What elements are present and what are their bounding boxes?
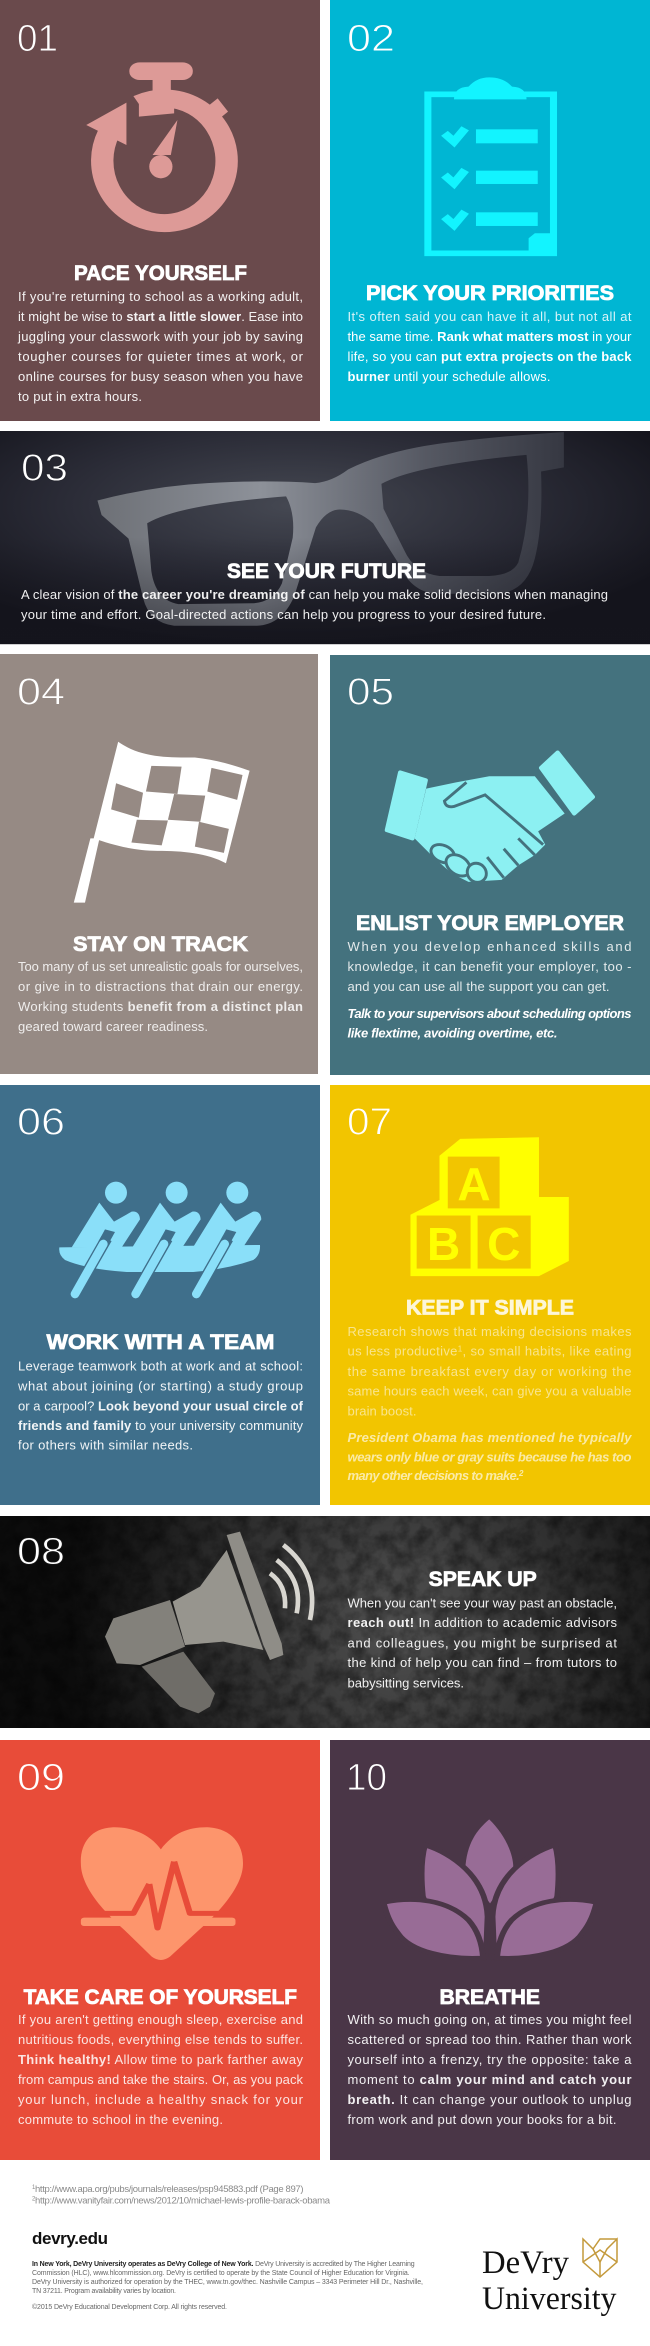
body text: It's often said you can have it all, but not all at [348,309,632,324]
body text: Think healthy! Allow time to park farther away [18,2052,304,2067]
icon: ABC blocks [410,1137,569,1276]
body text: Working students benefit from a distinct plan [18,999,303,1014]
body text: If you aren't getting enough sleep, exercise and [18,2012,303,2027]
heading: PACE YOURSELF [74,262,247,285]
number 08: 08 [17,1531,65,1573]
body text: the same time. Rank what matters most in your [348,329,632,344]
icon: lotus flower [384,1819,597,1958]
panel 05: enlist your employer [330,655,650,1075]
heading: STAY ON TRACK [73,933,248,956]
callout: Obama note [348,1430,632,1483]
icon: ABC blocks: B [427,1218,460,1270]
body text: When you can't see your way past an obstacle, [348,1595,617,1610]
body text: geared toward career readiness. [18,1019,208,1034]
body text [21,587,608,622]
icon: ABC blocks: C [487,1218,520,1270]
panel 10: breathe [330,1740,650,2160]
body text: online courses for busy season when you have [18,369,303,384]
panel 08: speak up [0,1516,650,1728]
body text: for others with similar needs. [18,1438,193,1452]
body text: A clear vision of the career you're dreaming of can help you make solid decisions when managing [21,587,608,602]
body text: the same breakfast every day or working the [348,1364,632,1379]
heading: SEE YOUR FUTURE [227,560,426,583]
body text: burner until your schedule allows. [348,369,550,384]
icon: ABC blocks: A [457,1158,491,1210]
footer: accreditation text: TN 37211. Program availability varies by location. [32,2288,176,2295]
body text: reach out! In addition to academic advisors [348,1615,618,1630]
body text: commute to school in the evening. [18,2112,223,2127]
body text [17,1358,304,1452]
number 04: 04 [17,672,65,714]
body text [18,2012,304,2127]
icon: handshake [387,753,593,886]
body text: it might be wise to start a little slower. Ease into [18,309,303,324]
body text: what about joining (or starting) a study group [17,1378,303,1393]
body text [348,309,632,384]
icon: rowing team [59,1182,261,1297]
body text [18,959,303,1034]
body text: breath. It can change your outlook to unplug [348,2092,632,2107]
body text: When you develop enhanced skills and [348,939,632,954]
footer: website: devry.edu [32,2229,108,2248]
body text: your lunch, include a healthy snack for your [18,2092,304,2107]
footer: source references: 2 [32,2196,36,2202]
body text: tougher courses for quieter times at work, or [18,349,304,364]
body text: knowledge, it can benefit your employer, too - [348,959,632,974]
logo: DeVry University [482,2239,617,2317]
body text: yourself into a frenzy, try the opposite: take a [348,2052,632,2067]
heading: PICK YOUR PRIORITIES [366,282,614,305]
body text: us less productive [348,1344,457,1359]
logo: DeVry University: DeVry [482,2245,569,2281]
icon: stopwatch [86,62,228,223]
icon: megaphone [105,1532,312,1713]
body text: juggling your classwork with your job by saving [17,329,303,344]
callout: Obama note: 2 [518,1469,524,1478]
callout: Obama note: President Obama has mentioned he typically [348,1430,632,1445]
body text: or a carpool? Look beyond your usual circle of [18,1398,304,1413]
body text: , so small habits, like eating [463,1344,632,1359]
number 09: 09 [17,1757,65,1799]
icon: glasses [0,430,650,644]
footer: source references [32,2184,331,2206]
body text: brain boost. [348,1403,416,1418]
number 02: 02 [347,18,395,60]
panel 02: pick your priorities [330,0,650,421]
body text [348,939,632,1040]
body text: friends and family to your university community [18,1418,304,1433]
panel 03: see your future [0,430,650,644]
body text: the kind of help you can find – from tutors to [348,1655,617,1670]
footer: source references: http://www.apa.org/pubs/journals/releases/psp945883.pdf (Page 897) [35,2184,303,2195]
footer: accreditation text: In New York, DeVry University operates as DeVry College of New York. DeVry University is accredited by The Higher Learning [32,2261,415,2268]
panel 07: keep it simple [330,1085,650,1505]
icon: clipboard checklist [428,77,555,255]
body text: to put in extra hours. [18,389,142,404]
panel 06: work with a team [0,1085,320,1505]
icon: gold shield [583,2239,617,2277]
heading: WORK WITH A TEAM [46,1331,274,1354]
body text [348,1595,618,1690]
panel 09: take care of yourself [0,1740,320,2160]
body text: your time and effort. Goal-directed actions can help you progress to your desired future. [21,607,546,622]
heading: ENLIST YOUR EMPLOYER [356,912,624,935]
callout: Obama note: wears only blue or gray suits because he has too [348,1450,632,1465]
body text: or give in to distractions that drain our energy. [18,979,303,994]
footer: accreditation text: DeVry University is authorized for operation by the THEC, www.tn.gov/thec. Nashville Campus – 3343 Perimeter Hill Dr., Nashville, [32,2279,423,2286]
heading: BREATHE [440,1986,540,2009]
body text [17,289,304,404]
body text: and you can use all the support you can get. [348,979,610,994]
body text: nutritious foods, everything else tends to suffer. [18,2032,303,2047]
number 10: 10 [346,1757,387,1799]
body text: 1 [458,1345,463,1354]
number 05: 05 [347,672,394,714]
number 01: 01 [17,18,58,60]
number 07: 07 [347,1102,392,1144]
heading: SPEAK UP [429,1568,537,1591]
footer: accreditation text [32,2261,423,2311]
body text: Research shows that making decisions makes [348,1324,632,1339]
callout: Obama note: many other decisions to make. [348,1468,520,1483]
body text: like flextime, avoiding overtime, etc. [348,1026,558,1040]
body text: With so much going on, at times you might feel [348,2012,632,2027]
body text: from campus and take the stairs. Or, as you pack [18,2072,304,2087]
footer: accreditation text: Commission (HLC), www.hlcommission.org. DeVry is certified to operate by the State Council of Higher Education for Virginia. [32,2270,410,2277]
body text: Leverage teamwork both at work and at school: [18,1358,303,1373]
number 03: 03 [21,448,68,490]
footer: source references: http://www.vanityfair.com/news/2012/10/michael-lewis-profile-barack-obama [35,2196,331,2206]
heading: KEEP IT SIMPLE [406,1296,574,1319]
body text: same hours each week, can give you a valuable [348,1384,632,1399]
body text: from work and put down your books for a bit. [348,2112,616,2127]
body text: Too many of us set unrealistic goals for ourselves, [18,959,303,974]
footer: accreditation text: ©2015 DeVry Educational Development Corp. All rights reserved. [32,2303,227,2311]
body text: Talk to your supervisors about scheduling options [348,1006,632,1021]
heading: TAKE CARE OF YOURSELF [24,1986,297,2009]
footer: source references: 1 [32,2185,36,2191]
icon: heart with pulse [81,1827,243,1960]
panel 01: pace yourself [0,0,320,421]
body text [348,1324,632,1418]
body text: babysitting services. [348,1675,464,1690]
body text: If you're returning to school as a working adult, [18,289,303,304]
icon: checkered flag [74,742,250,903]
body text: and colleagues, you might be surprised at [348,1635,617,1650]
body text: scattered or spread too thin. Rather than work [348,2032,632,2047]
panel 04: stay on track [0,654,318,1074]
body text [348,2012,632,2127]
number 06: 06 [17,1102,65,1144]
logo: DeVry University: University [482,2281,617,2317]
body text: moment to calm your mind and catch your [348,2072,632,2087]
body text: life, so you can put extra projects on the back [348,349,632,364]
